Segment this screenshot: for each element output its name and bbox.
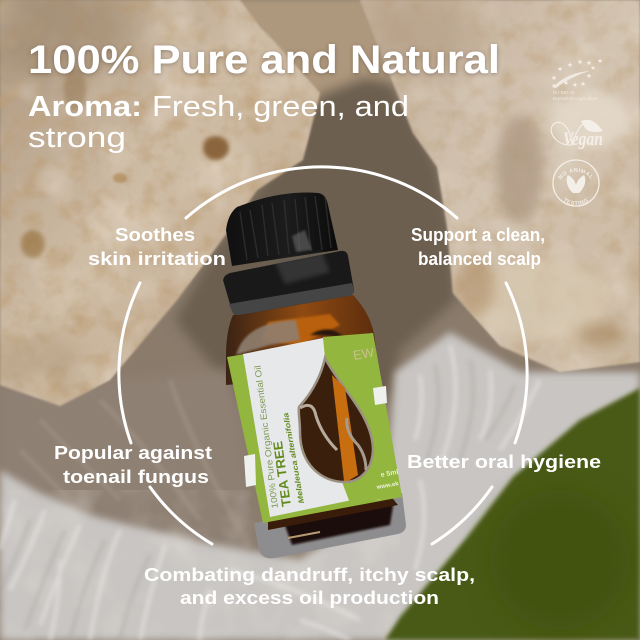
benefit: soothes skin irritation bbox=[88, 225, 226, 269]
bottle: label white panel bbox=[243, 338, 380, 517]
subtitle: aroma: Aroma: bbox=[28, 91, 142, 123]
background: green leaf corner bbox=[385, 388, 640, 640]
background: right rock bbox=[350, 0, 640, 380]
icon: EU organic leaf: ★ bbox=[572, 81, 578, 89]
bottle: latin name: Melaleuca alternifolia bbox=[281, 412, 306, 504]
icon: EU organic leaf: ★ bbox=[586, 72, 592, 80]
icon: EU organic leaf: ★ bbox=[567, 61, 573, 69]
icon: vegan bbox=[551, 120, 603, 150]
bottle: label small text: 100% Pure Organic Essential Oil bbox=[253, 365, 280, 509]
benefit: clean balanced scalp bbox=[411, 225, 545, 269]
icon: EU organic leaf: ★ bbox=[551, 82, 557, 90]
icon: EU organic leaf: EU-BIO-31 bbox=[553, 90, 576, 95]
benefit: soothes skin irritation: Soothes bbox=[115, 225, 195, 245]
icon: EU organic leaf: ★ bbox=[577, 58, 583, 66]
background: left rock bbox=[0, 0, 330, 410]
bottle: right small white tag bbox=[373, 386, 387, 405]
bottle: volume text: e 5ml bbox=[380, 469, 399, 479]
bottle: website text: www.ek bbox=[375, 481, 400, 491]
icon: EU organic leaf: ★ bbox=[597, 57, 603, 65]
icon: EU organic leaf: ★ bbox=[551, 74, 557, 82]
bottle: amber glass shoulder bbox=[226, 295, 378, 385]
benefit: clean balanced scalp: balanced scalp bbox=[418, 249, 541, 269]
subtitle: aroma: strong bbox=[28, 122, 126, 154]
icon: EU organic leaf: ★ bbox=[590, 64, 596, 72]
white circle arcs bbox=[119, 167, 527, 544]
icon: vegan: Vegan bbox=[563, 129, 603, 150]
benefit: combating dandruff: and excess oil production bbox=[180, 588, 439, 608]
benefit: oral hygiene: Better oral hygiene bbox=[407, 452, 601, 472]
icon: EU organic leaf: ★ bbox=[580, 80, 586, 88]
bottle: cap knurled top bbox=[226, 193, 338, 266]
icon: no animal testing: NO ANIMAL bbox=[558, 168, 592, 180]
bottle: cap collar bbox=[223, 251, 354, 315]
icon: no animal testing: TESTING bbox=[564, 198, 588, 205]
icon: no animal testing bbox=[552, 159, 600, 207]
bottle: brand mark: EW bbox=[352, 344, 376, 363]
bottle: left small white tag bbox=[244, 454, 256, 487]
subtitle: aroma bbox=[28, 91, 409, 154]
benefit: toenail fungus: Popular against bbox=[54, 443, 212, 463]
benefit: toenail fungus: toenail fungus bbox=[63, 467, 209, 487]
bottle: glass base bbox=[254, 493, 406, 558]
benefit: combating dandruff bbox=[144, 565, 475, 608]
benefit: soothes skin irritation: skin irritation bbox=[88, 249, 226, 269]
benefit: clean balanced scalp: Support a clean, bbox=[411, 225, 545, 245]
benefit: combating dandruff: Combating dandruff, itchy scalp, bbox=[144, 565, 475, 585]
icon: EU organic leaf bbox=[551, 57, 603, 101]
icon: EU organic leaf: ★ bbox=[557, 65, 563, 73]
background: ridged white surface bbox=[0, 332, 640, 640]
bottle: product name: TEA TREE bbox=[270, 440, 294, 508]
icon: EU organic leaf: ★ bbox=[563, 79, 569, 87]
bottle: oil drop graphic bbox=[299, 358, 373, 482]
icon: EU organic leaf: ★ bbox=[586, 59, 592, 67]
subtitle: aroma: Fresh, green, and bbox=[152, 91, 409, 123]
benefit: toenail fungus bbox=[54, 443, 212, 487]
bottle bbox=[223, 193, 406, 558]
title: 100% Pure and Natural bbox=[28, 38, 500, 82]
bottle: label green band bbox=[227, 333, 402, 523]
icon: EU organic leaf: EU/non EU Agriculture bbox=[553, 96, 598, 101]
